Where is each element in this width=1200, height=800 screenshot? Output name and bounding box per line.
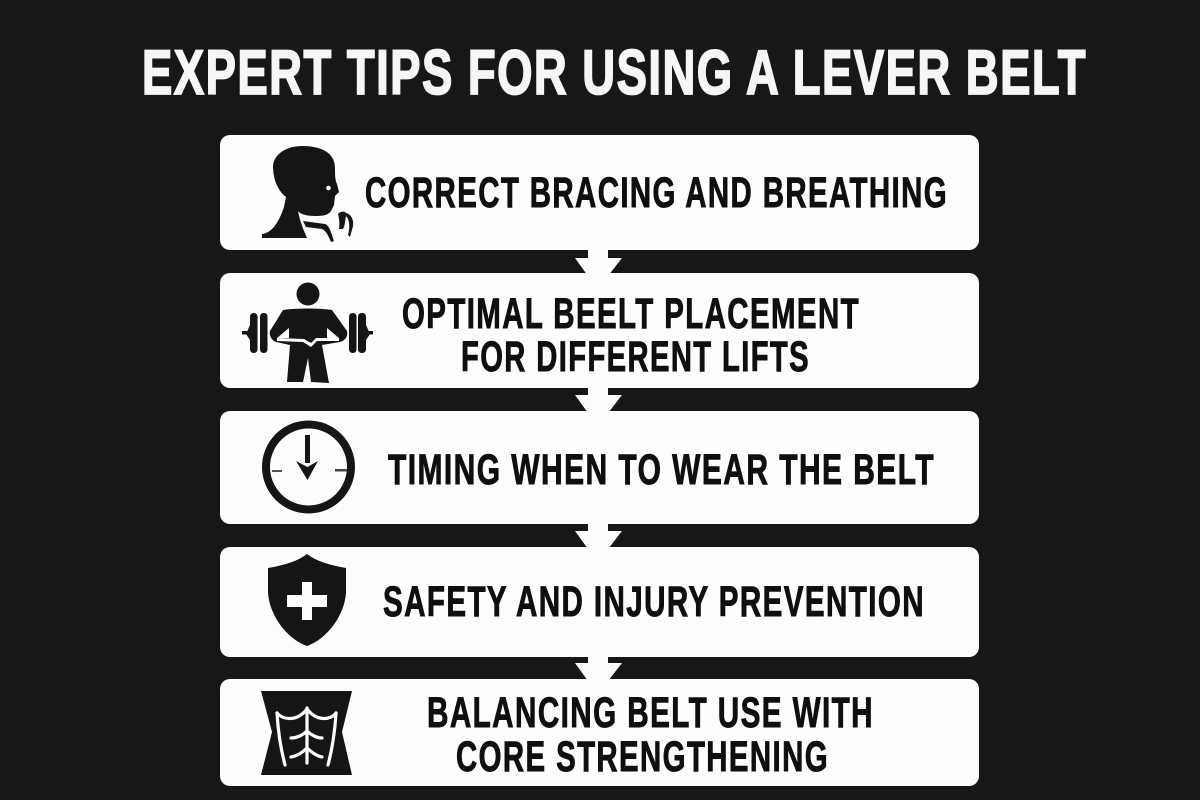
panel: balancing xyxy=(220,679,979,786)
icon: lifter with barbell xyxy=(242,282,373,383)
panel: safety xyxy=(220,547,979,657)
arrow: step 4 to 5 xyxy=(575,655,622,681)
label: TIMING WHEN TO WEAR THE BELT xyxy=(388,447,935,494)
panel: correct bracing and breathing xyxy=(220,135,979,250)
icon: head profile with breath xyxy=(262,146,353,242)
panel: timing xyxy=(220,411,979,524)
panel: optimal belt placement xyxy=(220,273,979,388)
arrow: step 1 to 2 xyxy=(575,248,622,276)
arrow: step 2 to 3 xyxy=(575,386,622,413)
icon: shield with cross xyxy=(268,554,346,646)
label line 1: OPTIMAL BEELT PLACEMENT xyxy=(402,291,860,338)
label: CORRECT BRACING AND BREATHING xyxy=(365,170,948,217)
label: SAFETY AND INJURY PREVENTION xyxy=(383,579,925,626)
label line 2: FOR DIFFERENT LIFTS xyxy=(461,334,810,381)
icon: clock xyxy=(266,424,351,510)
arrow: step 3 to 4 xyxy=(575,522,622,549)
label line 2: CORE STRENGTHENING xyxy=(456,734,829,781)
label line 1: BALANCING BELT USE WITH xyxy=(427,690,874,737)
icon: abdominal core xyxy=(261,691,352,775)
